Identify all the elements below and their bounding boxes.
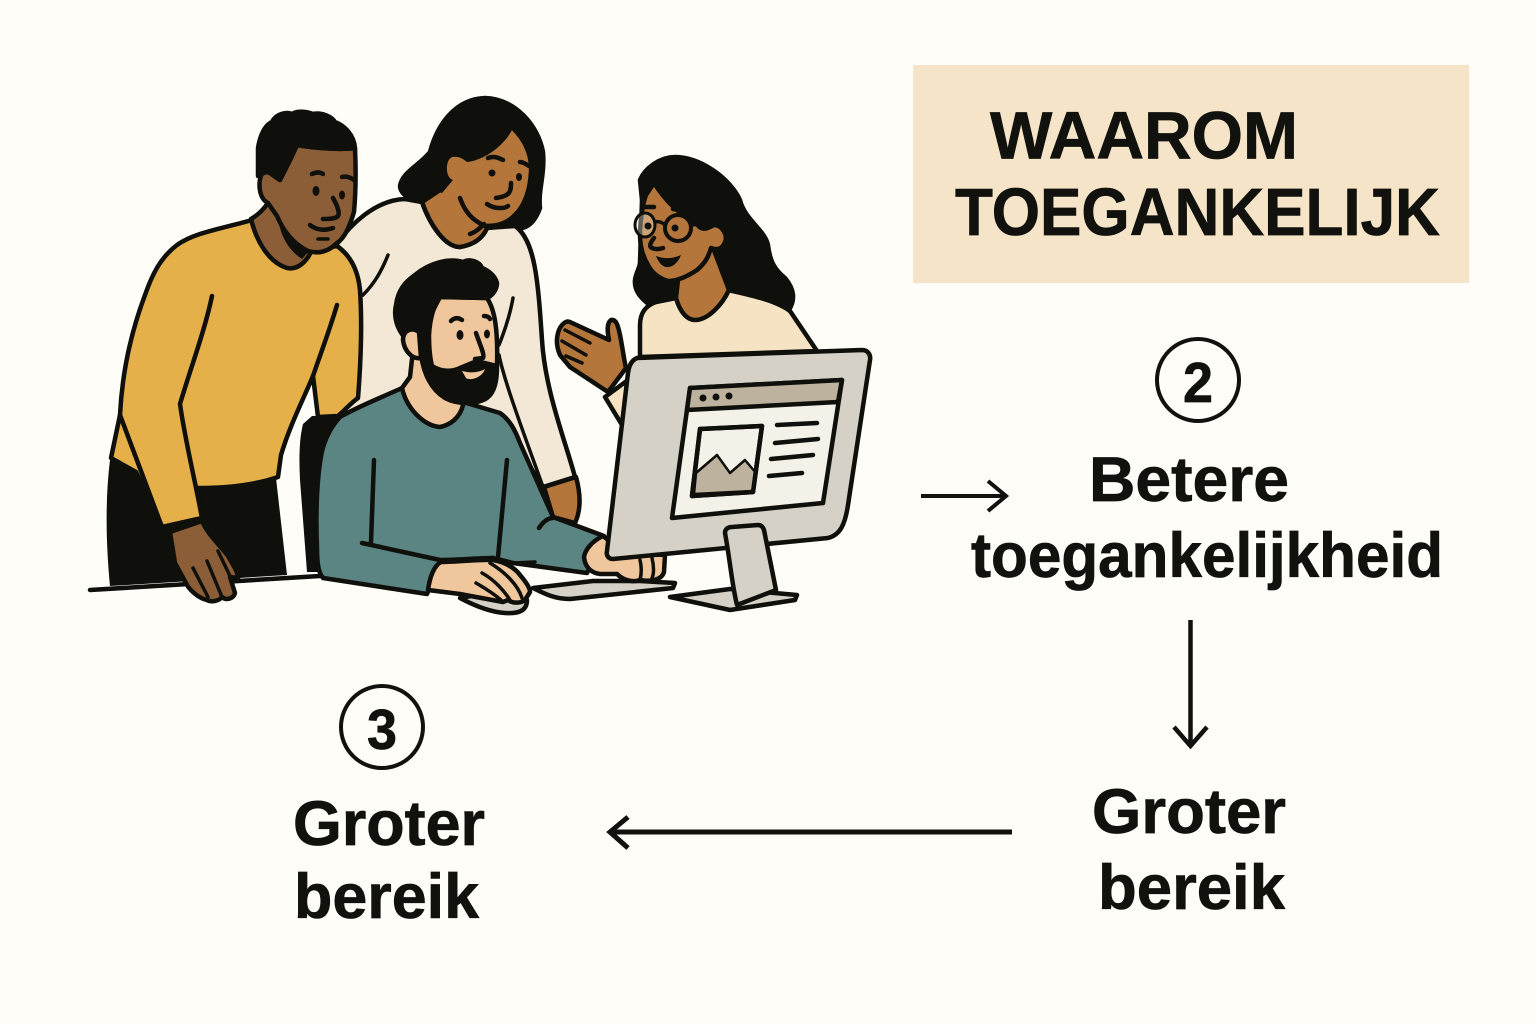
person: man in yellow sweater	[107, 112, 361, 601]
step 2 badge: 2	[1183, 351, 1213, 415]
step 3 badge	[341, 686, 423, 768]
chair back	[299, 415, 345, 572]
text: Groter bereik left	[293, 789, 485, 932]
heading: WAAROM	[990, 98, 1298, 174]
heading: TOEGANKELIJK	[955, 175, 1440, 250]
step 2 badge	[1157, 339, 1239, 421]
desk line	[513, 562, 535, 563]
image placeholder icon	[692, 426, 762, 496]
arrow: left	[610, 817, 1012, 848]
neck	[402, 350, 463, 427]
arrow: down	[1174, 620, 1207, 746]
glasses	[635, 213, 702, 241]
text: Groter bereik left: bereik	[294, 862, 480, 932]
person: seated man in teal sweater	[299, 260, 604, 613]
text: Groter bereik left: Groter	[293, 789, 485, 859]
table edge	[90, 576, 320, 590]
right hand on keyboard	[584, 536, 665, 581]
person: woman with glasses	[557, 157, 817, 425]
text: Groter bereik right: Groter	[1092, 777, 1286, 847]
illustration: team around a computer	[90, 98, 870, 613]
panel: title banner	[913, 65, 1469, 283]
ear	[403, 330, 421, 358]
hair and beard	[395, 260, 497, 403]
face	[428, 297, 497, 395]
text: Groter bereik right: bereik	[1098, 853, 1286, 923]
screen	[672, 380, 842, 518]
text: Betere toegankelijkheid: Betere	[1089, 445, 1289, 515]
monitor stand	[725, 525, 776, 605]
hand	[170, 521, 238, 601]
person: woman in cream sweater	[337, 98, 580, 523]
monitor base	[670, 589, 797, 610]
heading	[955, 98, 1440, 250]
keyboard	[533, 581, 675, 599]
raised hand	[557, 320, 626, 392]
step 3 badge: 3	[367, 698, 397, 762]
text: Betere toegankelijkheid	[971, 445, 1443, 591]
trousers	[107, 460, 287, 586]
arrow: illustration to step 2	[921, 481, 1006, 511]
left hand	[428, 560, 530, 603]
computer monitor	[607, 350, 870, 610]
mouse	[460, 590, 527, 613]
text: Betere toegankelijkheid: toegankelijkheid	[971, 521, 1443, 591]
text: Groter bereik right	[1092, 777, 1286, 923]
